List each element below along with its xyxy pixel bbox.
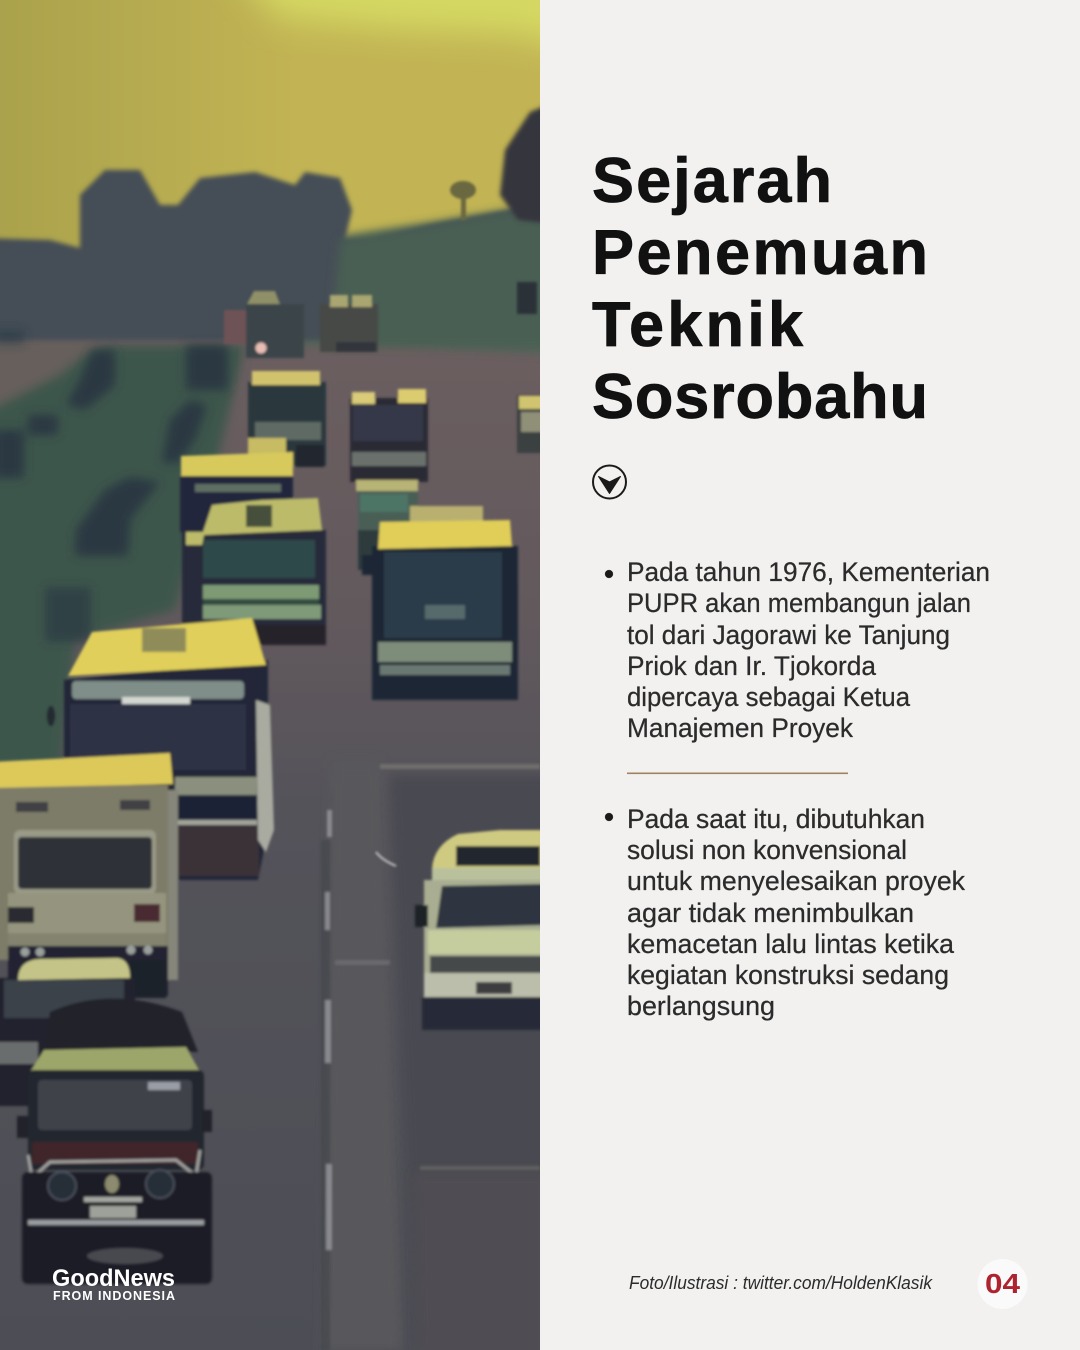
palm tree (450, 181, 476, 220)
right lane (392, 776, 540, 1078)
right dark tree (496, 104, 540, 225)
bullet text: berlangsung (627, 991, 775, 1021)
bullet text: Pada saat itu, dibutuhkan (627, 804, 925, 834)
vehicle: distant bus (248, 371, 326, 467)
title: Teknik (592, 290, 804, 360)
bullet text: Pada tahun 1976, Kementerian (627, 557, 990, 587)
bullet text (627, 557, 990, 743)
road and ground (0, 207, 540, 1350)
vehicle: large bus left (47, 618, 274, 880)
vehicle: far bus right (320, 295, 378, 352)
bullet text: PUPR akan membangun jalan (627, 588, 971, 618)
vehicle: edge vehicle right (516, 394, 540, 454)
tree line (0, 100, 560, 345)
vehicle: green bus (182, 498, 326, 645)
vehicle: yellow roof bus (180, 438, 293, 532)
median strip (330, 997, 400, 1348)
vehicle: truck (0, 753, 178, 998)
bullet text: agar tidak menimbulkan (627, 898, 914, 928)
bullet text (627, 804, 965, 1021)
page number badge (978, 1259, 1028, 1309)
bullet text: kegiatan konstruksi sedang (627, 960, 949, 990)
icon: arrow down in circle (593, 466, 626, 498)
logo tagline: FROM INDONESIA (53, 1289, 175, 1303)
bullet text: solusi non konvensional (627, 835, 907, 865)
vehicle: right light car (414, 828, 540, 1031)
road lane markings (321, 764, 540, 1350)
vehicle: dark car behind jeep (0, 958, 135, 1106)
panel: right text background (540, 0, 1080, 1350)
bullet text: untuk menyelesaikan proyek (627, 866, 965, 896)
vehicle: small green minibus (356, 480, 418, 570)
vehicles (0, 291, 560, 1284)
photo credit: Foto/Ilustrasi : twitter.com/HoldenKlasik (629, 1273, 933, 1293)
bullet text: tol dari Jagorawi ke Tanjung (627, 620, 950, 650)
logo wordmark: GoodNews (52, 1265, 175, 1292)
vehicle: dark front bus (350, 389, 428, 482)
vehicle: jeep (17, 998, 212, 1284)
title: Penemuan (592, 218, 928, 288)
bullet text: dipercaya sebagai Ketua (627, 682, 911, 712)
bullet text: Priok dan Ir. Tjokorda (627, 651, 877, 681)
vehicle: far bus left (224, 291, 304, 358)
bullet text: Manajemen Proyek (627, 713, 853, 743)
title: Sejarah (592, 146, 832, 216)
sky (0, 0, 540, 251)
title: Sosrobahu (592, 362, 928, 432)
logo: GoodNews From Indonesia (52, 1265, 175, 1303)
vehicle: bus front right (362, 506, 518, 700)
photo: traffic on the highway at dusk (0, 0, 600, 1350)
bullet point 1 (605, 557, 990, 743)
median hedge patches (0, 330, 228, 642)
title (592, 146, 928, 432)
bullet text: kemacetan lalu lintas ketika (627, 929, 955, 959)
bullet marker (605, 813, 613, 821)
page number badge: 04 (985, 1268, 1020, 1299)
bullet marker (605, 570, 613, 578)
bullet point 2 (605, 804, 965, 1021)
